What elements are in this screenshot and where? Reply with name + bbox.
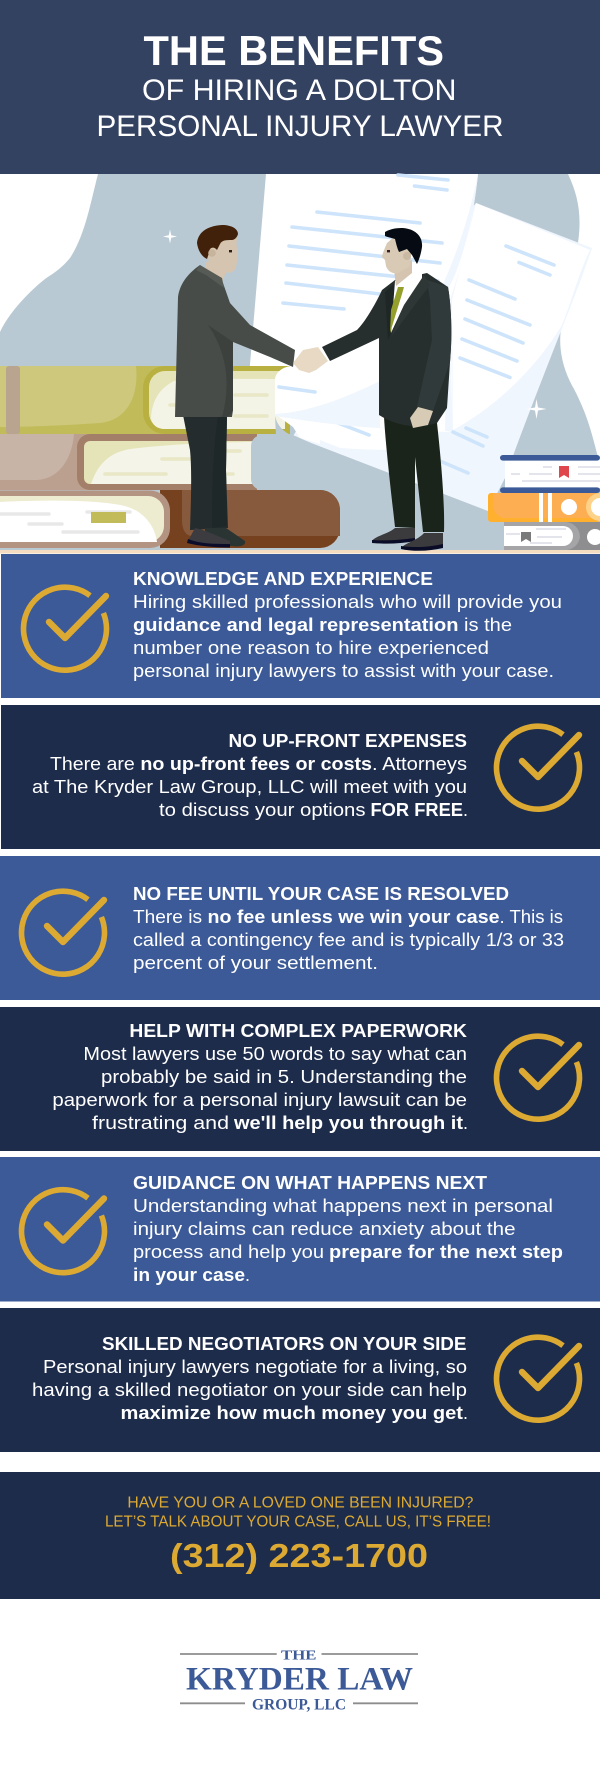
document: front sheet: [247, 174, 478, 432]
panel text: prepare for the next step: [329, 1242, 563, 1262]
shoes: [205, 528, 245, 546]
tie: [390, 287, 404, 333]
background blob: [0, 174, 600, 551]
panel text: NO FEE UNTIL YOUR CASE IS RESOLVED: [133, 883, 509, 904]
book: gray: [504, 522, 600, 551]
panel: guidance on what happens next: [0, 1157, 600, 1302]
phone number: (312) 223-1700: [170, 1538, 428, 1575]
neck and head: [205, 242, 238, 283]
logo: The Kryder Law Group, LLC: GROUP, LLC: [252, 1696, 346, 1713]
book: olive: [0, 366, 290, 434]
paper curl over the books: [251, 366, 380, 490]
logo: The Kryder Law Group, LLC: [180, 1648, 418, 1713]
panel text: SKILLED NEGOTIATORS ON YOUR SIDE: [102, 1333, 466, 1354]
panel text: in your case: [133, 1265, 245, 1285]
panel text: [133, 568, 562, 681]
jacket: [175, 265, 295, 417]
panel: knowledge and experience: [1, 554, 600, 698]
panel text: to discuss your options: [159, 800, 366, 820]
icon: check circle: [496, 726, 579, 809]
panel text: maximize how much money you get: [120, 1403, 463, 1423]
icon: check circle: [21, 1190, 104, 1273]
book: brown: [0, 490, 340, 548]
header banner: [0, 0, 600, 174]
books: right stack: [488, 455, 600, 551]
book: tan: [0, 434, 257, 490]
panel text: There is: [133, 907, 202, 927]
panel text: Personal injury lawyers negotiate for a living, so: [43, 1357, 467, 1377]
panel text: HELP WITH COMPLEX PAPERWORK: [129, 1020, 468, 1041]
logo: The Kryder Law Group, LLC: KRYDER LAW: [186, 1661, 413, 1697]
panel text: personal injury lawyers to assist with your case.: [133, 661, 554, 681]
panel text: .: [463, 800, 468, 820]
panel text: [32, 1333, 468, 1423]
icon: check circle: [496, 1337, 579, 1420]
panel text: KNOWLEDGE AND EXPERIENCE: [133, 568, 433, 589]
panel text: process and help you: [133, 1242, 324, 1262]
icon: check circle: [21, 891, 104, 974]
floor: [0, 550, 600, 554]
lapels: [385, 283, 395, 340]
panel text: percent of your settlement.: [133, 953, 378, 973]
panel text: .: [463, 1113, 468, 1133]
panel text: having a skilled negotiator on your side can help: [32, 1380, 467, 1400]
panel text: no fee unless we win your case: [208, 907, 500, 927]
panel: no fee until your case is resolved: [0, 856, 600, 1000]
panel text: injury claims can reduce anxiety about the: [133, 1219, 516, 1239]
panel text: is the: [464, 615, 512, 635]
title: PERSONAL INJURY LAWYER: [96, 110, 504, 143]
jacket and arm: [322, 273, 451, 426]
call to action banner: [0, 1472, 600, 1599]
panel text: probably be said in 5. Understanding the: [101, 1067, 467, 1087]
illustration: handshake between two men with books and documents: [0, 174, 600, 554]
panel text: . This is: [500, 907, 563, 927]
shirt collar and neck: [391, 268, 422, 333]
panel text: [52, 1020, 468, 1133]
head: [382, 232, 412, 273]
hand on the side: [410, 407, 433, 428]
call to action text: HAVE YOU OR A LOVED ONE BEEN INJURED?: [127, 1495, 473, 1512]
title: THE BENEFITS: [144, 27, 444, 74]
panel text: paperwork for a personal injury lawsuit can be: [52, 1090, 467, 1110]
panel text: no up-front fees or costs: [140, 754, 372, 774]
shoes: [372, 528, 415, 542]
handshake hands: [293, 347, 328, 373]
panel text: at The Kryder Law Group, LLC will meet with you: [32, 777, 467, 797]
panel text: .: [463, 1403, 468, 1423]
panel text: Hiring skilled professionals who will provide you: [133, 592, 562, 612]
icon: check circle: [23, 587, 106, 670]
title: [96, 27, 504, 143]
panel text: we'll help you through it: [233, 1113, 463, 1133]
trousers: [183, 415, 228, 530]
panel text: [133, 883, 564, 973]
panel text: GUIDANCE ON WHAT HAPPENS NEXT: [133, 1172, 488, 1193]
panel text: guidance and legal representation: [133, 615, 458, 635]
man on the right: [322, 228, 451, 551]
icon: check circle: [496, 1036, 579, 1119]
panel text: frustrating and: [92, 1113, 229, 1133]
panel: skilled negotiators on your side: [0, 1308, 600, 1452]
panel text: Understanding what happens next in personal: [133, 1196, 553, 1216]
panel: help with complex paperwork: [0, 1007, 600, 1151]
panel text: [32, 730, 468, 820]
title: OF HIRING A DOLTON: [142, 74, 456, 107]
logo: The Kryder Law Group, LLC: THE: [281, 1648, 316, 1663]
books: left stack: [0, 366, 380, 548]
panel text: [133, 1172, 563, 1285]
panel text: Most lawyers use 50 words to say what can: [83, 1044, 467, 1064]
panel text: .: [245, 1265, 250, 1285]
panel text: FOR FREE: [370, 800, 463, 820]
book: orange: [488, 493, 600, 522]
book: white with red bookmark: [500, 455, 600, 493]
panel text: number one reason to hire experienced: [133, 638, 489, 658]
panel text: called a contingency fee and is typically 1/3 or 33: [133, 930, 564, 950]
man on the left: [175, 225, 295, 548]
panel text: There are: [50, 754, 135, 774]
sparkles: [163, 230, 546, 419]
document text lines: [283, 175, 554, 473]
trousers: [384, 417, 444, 532]
panel: no up-front expenses: [1, 705, 600, 849]
call to action text second line: LET’S TALK ABOUT YOUR CASE, CALL US, IT’S FREE!: [105, 1514, 491, 1531]
sleeve: [417, 280, 451, 411]
document: back sheet: [293, 203, 592, 511]
panel text: . Attorneys: [372, 754, 467, 774]
panel text: NO UP-FRONT EXPENSES: [228, 730, 467, 751]
